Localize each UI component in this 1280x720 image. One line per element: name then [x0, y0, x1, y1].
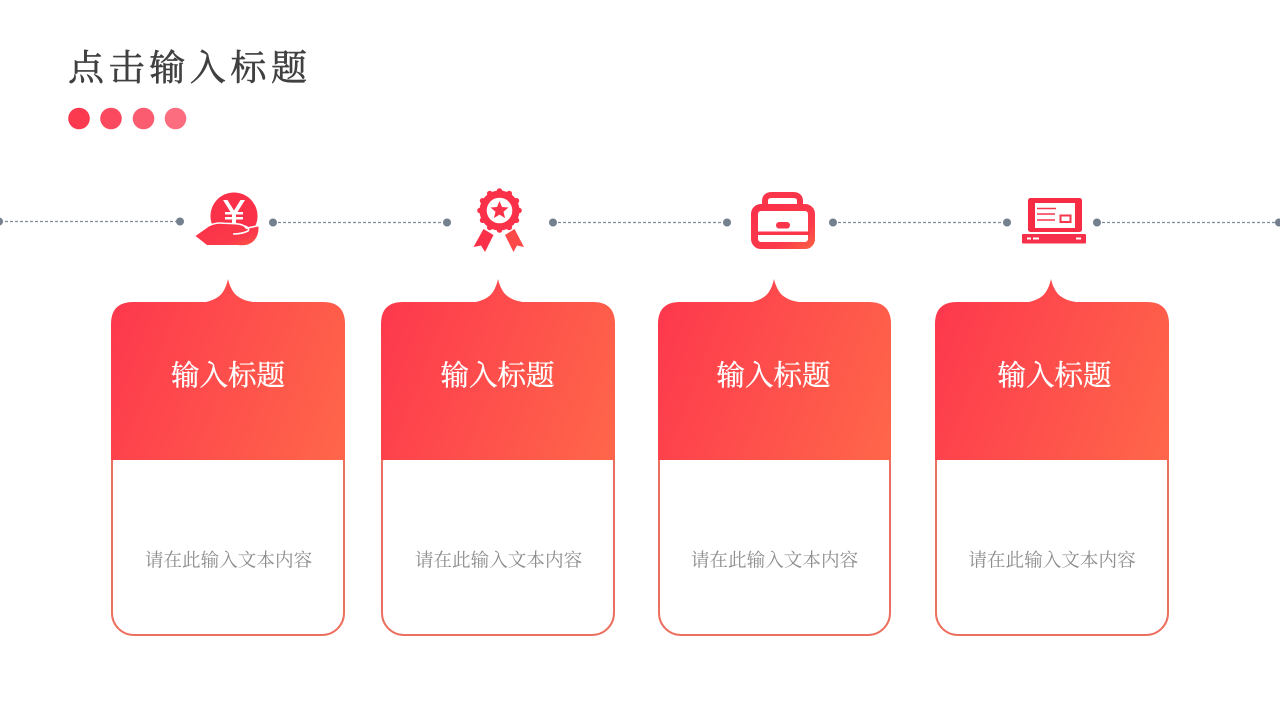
card 4 body outline: [936, 440, 1168, 635]
timeline connector: [0, 218, 1280, 226]
card 2 text: 请在此输入文本内容: [415, 550, 582, 572]
icon: hand holding yen coin: [196, 192, 259, 245]
card 4 text: 请在此输入文本内容: [968, 550, 1136, 572]
panel: card 4: [935, 279, 1169, 635]
panel: card 1: [111, 279, 345, 635]
card 3 body outline: [659, 440, 890, 635]
card 1 header: [111, 279, 345, 460]
card 2 header: [381, 279, 615, 460]
card 3 heading: 输入标题: [716, 360, 831, 392]
icon: briefcase: [754, 195, 812, 246]
icon: award ribbon badge: [474, 188, 524, 252]
title: 点击输入标题: [68, 48, 312, 88]
card 4 header: [935, 279, 1169, 460]
card 1 heading: 输入标题: [171, 360, 285, 392]
card 3 header: [658, 279, 891, 460]
card 4 heading: 输入标题: [997, 360, 1112, 392]
panel: card 3: [658, 279, 891, 635]
icon: laptop: [1022, 198, 1086, 244]
decorative dots: [68, 108, 186, 129]
card 1 text: 请在此输入文本内容: [145, 550, 312, 572]
card 2 heading: 输入标题: [440, 360, 555, 392]
panel: card 2: [381, 279, 615, 635]
card 2 body outline: [382, 440, 614, 635]
card 3 text: 请在此输入文本内容: [691, 550, 858, 572]
card 1 body outline: [112, 440, 344, 635]
